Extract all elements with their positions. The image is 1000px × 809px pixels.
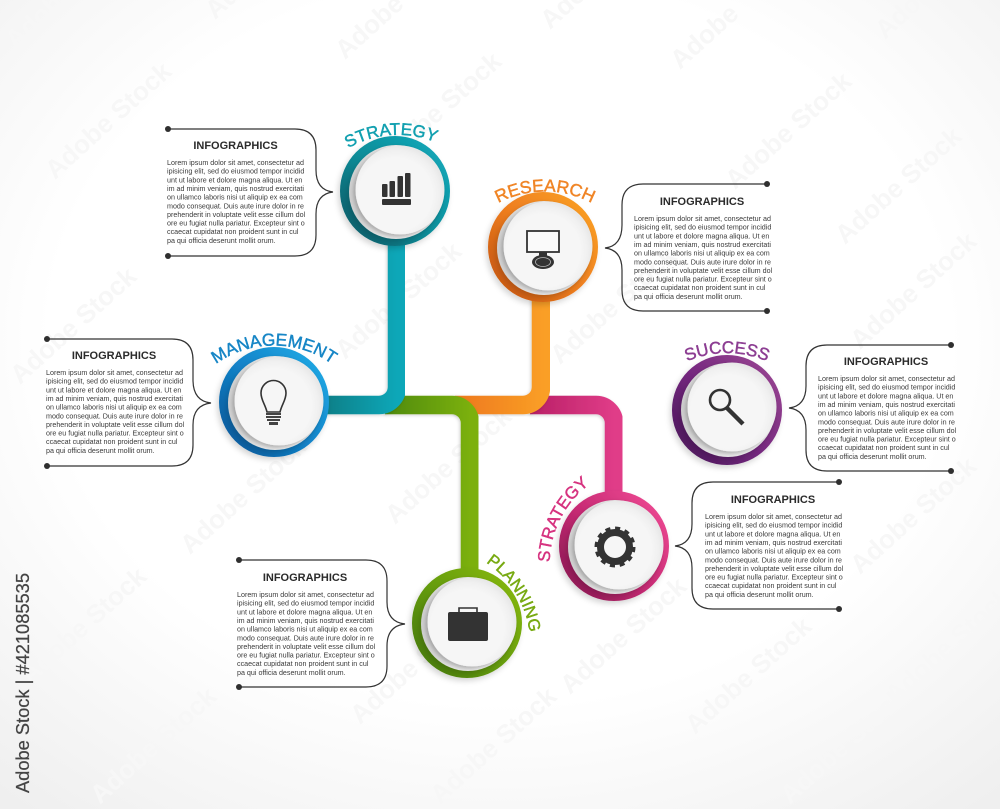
body text: im ad minim veniam, quis nostrud exercitati bbox=[634, 241, 771, 249]
icon: magnifier bbox=[710, 390, 743, 424]
body text: on ullamco laboris nisi ut aliquip ex ea com bbox=[167, 194, 303, 202]
watermarks: Adobe Stock bbox=[774, 680, 913, 809]
label: RESEARCH: RESEARCH bbox=[494, 179, 596, 203]
heading: INFOGRAPHICS bbox=[263, 572, 347, 584]
body text: on ullamco laboris nisi ut aliquip ex ea com bbox=[818, 410, 954, 418]
body text: ore eu fugiat nulla pariatur. Excepteur sint o bbox=[237, 652, 375, 660]
body text: ore eu fugiat nulla pariatur. Excepteur sint o bbox=[46, 430, 184, 438]
body text: ore eu fugiat nulla pariatur. Excepteur sint o bbox=[705, 574, 843, 582]
watermarks: Adobe bbox=[664, 0, 744, 74]
body text: ipisicing elit, sed do eiusmod tempor incidid bbox=[818, 384, 955, 392]
body text: modo consequat. Duis aute irure dolor in re bbox=[818, 418, 955, 426]
body text: pa qui officia deserunt mollit orum. bbox=[634, 293, 743, 301]
connector: purple bbox=[600, 396, 690, 414]
body text: ipisicing elit, sed do eiusmod tempor incidid bbox=[46, 378, 183, 386]
body text: modo consequat. Duis aute irure dolor in re bbox=[705, 556, 842, 564]
callout: research bbox=[605, 181, 773, 314]
body text: prehenderit in voluptate velit esse cillum dol bbox=[705, 565, 844, 573]
node: success (purple) bbox=[668, 341, 782, 470]
label: STRATEGY: STRATEGY bbox=[538, 475, 586, 562]
icon: monitor bbox=[527, 231, 559, 269]
icon: bar chart bbox=[382, 173, 411, 205]
callout: strategy pink bbox=[675, 479, 844, 612]
watermarks: Adobe Stock bbox=[844, 225, 983, 354]
callout: strategy bbox=[165, 126, 333, 259]
body text: ore eu fugiat nulla pariatur. Excepteur sint o bbox=[818, 436, 956, 444]
body text: modo consequat. Duis aute irure dolor in re bbox=[46, 412, 183, 420]
body text: im ad minim veniam, quis nostrud exercitati bbox=[46, 395, 183, 403]
body text: pa qui officia deserunt mollit orum. bbox=[705, 591, 814, 599]
body text: unt ut labore et dolore magna aliqua. Ut en bbox=[705, 530, 840, 538]
connector network bbox=[320, 235, 690, 580]
heading: INFOGRAPHICS bbox=[660, 196, 744, 208]
watermarks: Adobe Stock bbox=[344, 600, 483, 729]
body text: pa qui officia deserunt mollit orum. bbox=[818, 453, 927, 461]
body text: ore eu fugiat nulla pariatur. Excepteur sint o bbox=[167, 220, 305, 228]
body text: prehenderit in voluptate velit esse cillum dol bbox=[634, 267, 773, 275]
watermarks: Adobe Stock bbox=[844, 450, 983, 579]
watermarks: Adobe Stock bbox=[544, 240, 683, 369]
icon: gear bbox=[596, 528, 634, 566]
body text: Lorem ipsum dolor sit amet, consectetur ad bbox=[818, 375, 955, 383]
body text: pa qui officia deserunt mollit orum. bbox=[237, 669, 346, 677]
body text: Lorem ipsum dolor sit amet, consectetur ad bbox=[167, 159, 304, 167]
body text: pa qui officia deserunt mollit orum. bbox=[167, 237, 276, 245]
body text: ipisicing elit, sed do eiusmod tempor incidid bbox=[237, 600, 374, 608]
body text: Lorem ipsum dolor sit amet, consectetur ad bbox=[46, 369, 183, 377]
body text: im ad minim veniam, quis nostrud exercitati bbox=[818, 401, 955, 409]
body text: im ad minim veniam, quis nostrud exercitati bbox=[167, 185, 304, 193]
body text: prehenderit in voluptate velit esse cillum dol bbox=[46, 421, 185, 429]
icon: briefcase bbox=[448, 608, 488, 641]
heading: INFOGRAPHICS bbox=[72, 350, 156, 362]
body text: ipisicing elit, sed do eiusmod tempor incidid bbox=[705, 522, 842, 530]
body text: on ullamco laboris nisi ut aliquip ex ea com bbox=[237, 626, 373, 634]
connector: pink bbox=[530, 405, 614, 505]
heading: INFOGRAPHICS bbox=[731, 494, 815, 506]
stock credit: Adobe Stock | #421085535 bbox=[12, 573, 33, 793]
body text: on ullamco laboris nisi ut aliquip ex ea com bbox=[634, 250, 770, 258]
watermarks: Adobe Stock bbox=[554, 570, 693, 699]
body text: Lorem ipsum dolor sit amet, consectetur ad bbox=[705, 513, 842, 521]
body text: prehenderit in voluptate velit esse cillum dol bbox=[237, 643, 376, 651]
body text: unt ut labore et dolore magna aliqua. Ut en bbox=[167, 176, 302, 184]
label: MANAGEMENT: MANAGEMENT bbox=[210, 333, 338, 364]
body text: unt ut labore et dolore magna aliqua. Ut en bbox=[818, 392, 953, 400]
icon: light bulb bbox=[261, 380, 286, 425]
body text: ore eu fugiat nulla pariatur. Excepteur sint o bbox=[634, 276, 772, 284]
watermarks: Adobe Stock bbox=[829, 120, 968, 249]
node: strategy (teal) bbox=[336, 122, 450, 251]
watermarks: Adobe Stock bbox=[14, 560, 153, 689]
connector: green bbox=[385, 405, 470, 580]
body text: ccaecat cupidatat non proident sunt in cul bbox=[46, 438, 178, 446]
body text: im ad minim veniam, quis nostrud exercitati bbox=[237, 617, 374, 625]
body text: ccaecat cupidatat non proident sunt in cul bbox=[705, 582, 837, 590]
callout: planning bbox=[236, 557, 405, 690]
body text: unt ut labore et dolore magna aliqua. Ut en bbox=[634, 232, 769, 240]
body text: pa qui officia deserunt mollit orum. bbox=[46, 447, 155, 455]
body text: ipisicing elit, sed do eiusmod tempor incidid bbox=[167, 168, 304, 176]
connector: teal bbox=[320, 235, 397, 405]
watermarks: Adobe Stock bbox=[39, 55, 178, 184]
body text: prehenderit in voluptate velit esse cillum dol bbox=[818, 427, 957, 435]
connector: orange bbox=[455, 290, 541, 405]
body text: Lorem ipsum dolor sit amet, consectetur ad bbox=[634, 215, 771, 223]
body text: ipisicing elit, sed do eiusmod tempor incidid bbox=[634, 224, 771, 232]
callout: management bbox=[44, 336, 211, 469]
label: SUCCESS: SUCCESS bbox=[684, 341, 770, 360]
body text: Lorem ipsum dolor sit amet, consectetur ad bbox=[237, 591, 374, 599]
watermarks: Adobe Stock bbox=[719, 65, 858, 194]
body text: ccaecat cupidatat non proident sunt in cul bbox=[167, 228, 299, 236]
body text: modo consequat. Duis aute irure dolor in re bbox=[634, 258, 771, 266]
label: PLANNING: PLANNING bbox=[486, 554, 540, 632]
watermarks: Adobe Stock bbox=[369, 45, 508, 174]
body text: modo consequat. Duis aute irure dolor in re bbox=[167, 202, 304, 210]
body text: unt ut labore et dolore magna aliqua. Ut en bbox=[237, 608, 372, 616]
body text: unt ut labore et dolore magna aliqua. Ut en bbox=[46, 386, 181, 394]
watermarks: Adobe Stock bbox=[424, 680, 563, 809]
heading: INFOGRAPHICS bbox=[844, 356, 928, 368]
node: strategy (pink) bbox=[538, 475, 669, 606]
body text: ccaecat cupidatat non proident sunt in cul bbox=[818, 444, 950, 452]
watermarks: Adobe Stock bbox=[329, 235, 468, 364]
node: research (orange) bbox=[484, 179, 598, 307]
node: planning (green) bbox=[408, 554, 540, 683]
body text: on ullamco laboris nisi ut aliquip ex ea com bbox=[46, 404, 182, 412]
label: STRATEGY: STRATEGY bbox=[344, 122, 440, 147]
body text: ccaecat cupidatat non proident sunt in cul bbox=[237, 660, 369, 668]
body text: prehenderit in voluptate velit esse cillum dol bbox=[167, 211, 306, 219]
watermarks: Adobe Stock bbox=[679, 610, 818, 739]
callout: success bbox=[789, 342, 957, 474]
watermarks: Adobe Stock bbox=[4, 260, 143, 389]
watermarks: Adobe Stock bbox=[84, 680, 223, 809]
body text: on ullamco laboris nisi ut aliquip ex ea com bbox=[705, 548, 841, 556]
watermarks: Adobe Stock bbox=[174, 430, 313, 559]
node: management (blue) bbox=[210, 333, 338, 462]
body text: ccaecat cupidatat non proident sunt in cul bbox=[634, 284, 766, 292]
watermarks: Adobe Stock bbox=[379, 400, 518, 529]
body text: im ad minim veniam, quis nostrud exercitati bbox=[705, 539, 842, 547]
body text: modo consequat. Duis aute irure dolor in re bbox=[237, 634, 374, 642]
heading: INFOGRAPHICS bbox=[193, 140, 278, 152]
